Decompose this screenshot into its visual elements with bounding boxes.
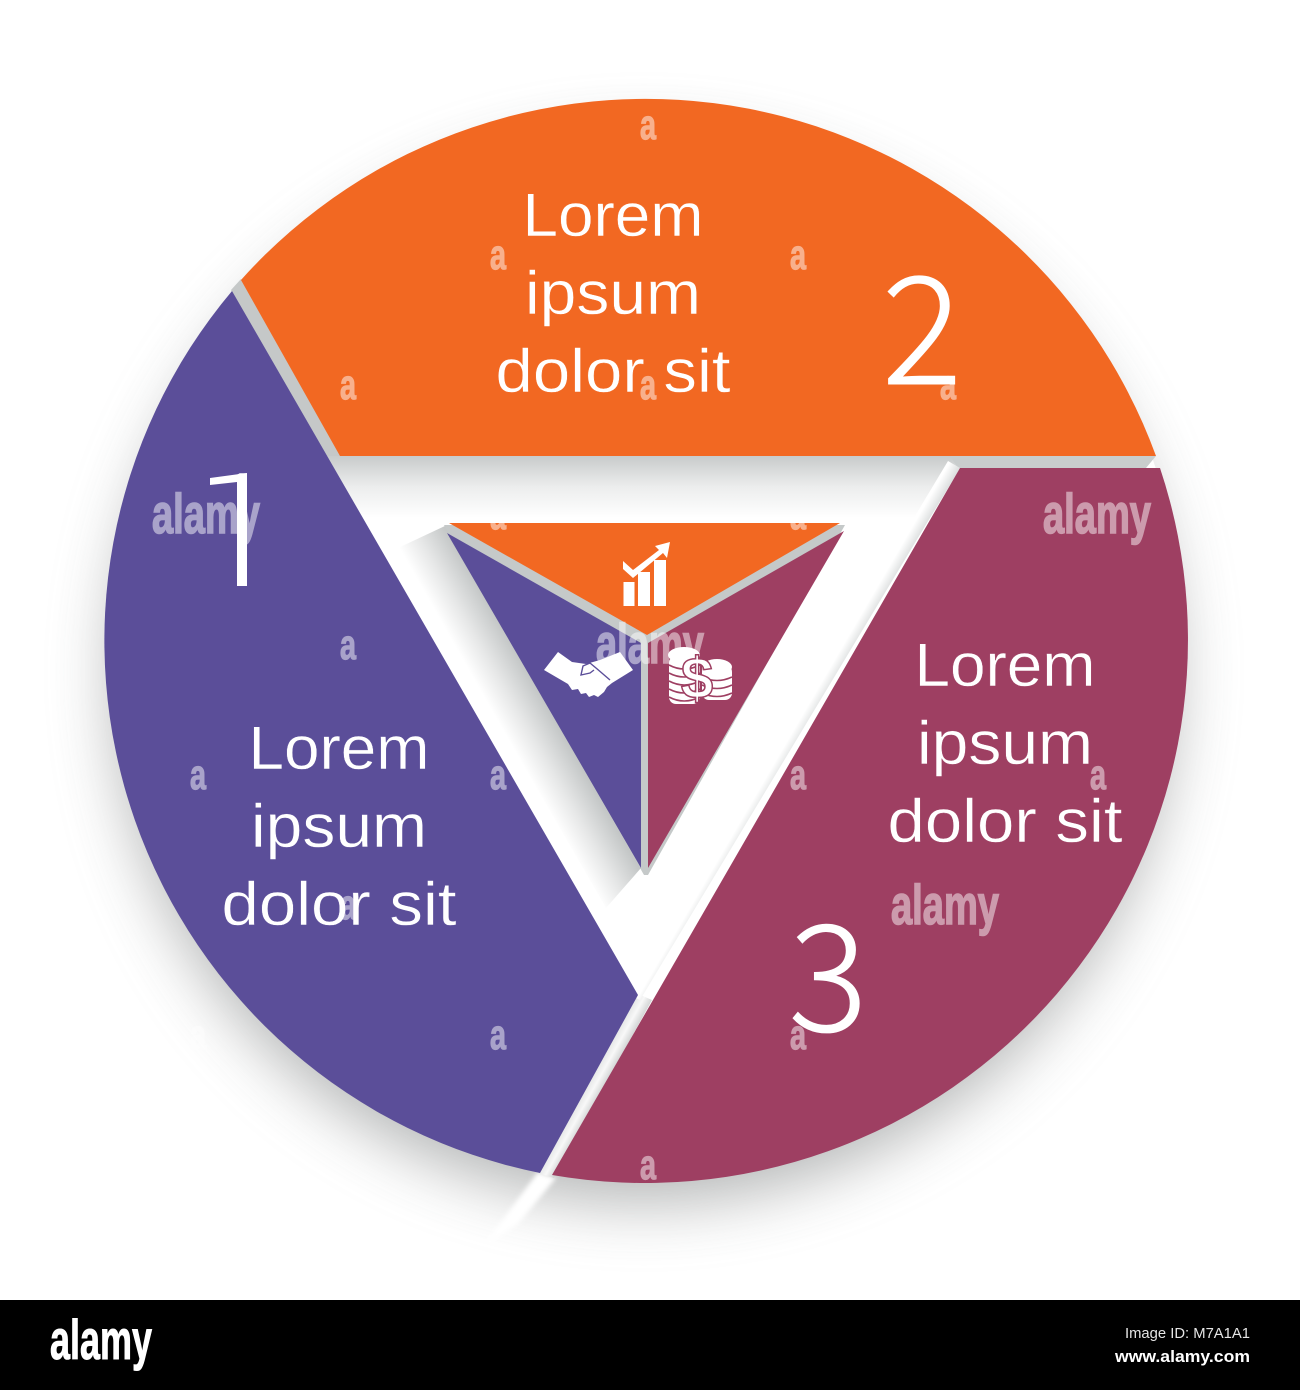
gap strip between segments 1 and 3 [537, 993, 652, 1178]
segment 2 text [496, 181, 731, 405]
watermarks: a [1090, 751, 1106, 798]
gap strip between segments 2 and 3 [950, 456, 1156, 468]
shadow below orange segment [320, 456, 966, 518]
inner wedge: purple [447, 533, 641, 868]
segment 1 text: ipsum [251, 792, 427, 860]
segment 1 text: dolor sit [222, 870, 457, 938]
icon: handshake [544, 652, 633, 697]
number 3: 3 [788, 859, 868, 1074]
website: www.alamy.com [1114, 1347, 1250, 1366]
segment 1 text [222, 714, 457, 938]
watermarks: a [490, 491, 506, 538]
footer logo: alamy [50, 1308, 152, 1371]
circle drop shadow [114, 142, 1174, 1202]
white disc base [108, 102, 1184, 1178]
white cut through the shadow [482, 1172, 556, 1248]
inner wedge: maroon [648, 531, 844, 868]
watermarks: a [490, 1011, 506, 1058]
watermarks: a [490, 231, 506, 278]
watermarks: a [340, 881, 356, 928]
panel: inner triangle [444, 523, 845, 875]
image id: Image ID: M7A1A1 [1125, 1325, 1250, 1342]
watermarks: a [340, 361, 356, 408]
watermarks: a [940, 361, 956, 408]
panel: segment 1 [104, 291, 638, 1173]
watermarks: a [640, 1141, 656, 1188]
icon: growth chart [623, 542, 670, 606]
icon: coins [668, 646, 732, 711]
segment 2 text: ipsum [525, 259, 701, 327]
watermarks: a [490, 751, 506, 798]
footer bar [0, 1300, 1300, 1390]
shadow along the edge of segment 3 [628, 461, 960, 1000]
segment 3 text: dolor sit [888, 787, 1123, 855]
gap strip between segments 1 and 2 [231, 279, 342, 457]
inner wedge: orange [449, 523, 840, 635]
watermarks: a [790, 231, 806, 278]
watermarks: a [790, 751, 806, 798]
coin stripes [669, 665, 732, 701]
dollar sign: $ [681, 646, 713, 711]
panel: segment 3 [552, 468, 1188, 1183]
watermark: centre: alamy [596, 612, 704, 675]
number 1 [210, 473, 247, 586]
number 2: 2 [882, 211, 962, 428]
segment 2 text: Lorem [522, 181, 704, 249]
segment 1 text: Lorem [248, 714, 430, 782]
watermarks: a [790, 491, 806, 538]
watermarks: a [640, 101, 656, 148]
segment 2 text: dolor sit [496, 337, 731, 405]
watermarks: a [190, 1011, 206, 1058]
segment 3 text: ipsum [917, 709, 1093, 777]
segment 3 text: Lorem [914, 631, 1096, 699]
number 1: 1 [199, 405, 281, 630]
watermarks: alamy [1043, 482, 1151, 545]
watermarks: alamy [891, 873, 999, 936]
watermarks: a [790, 1011, 806, 1058]
watermarks: alamy [152, 482, 260, 545]
watermarks: a [190, 751, 206, 798]
segment 3 text [888, 631, 1123, 855]
panel: segment 2 [241, 99, 1156, 456]
watermarks: a [340, 621, 356, 668]
watermarks: a [640, 361, 656, 408]
shadow left of inner triangle [398, 525, 641, 908]
watermarks [152, 101, 1151, 1188]
